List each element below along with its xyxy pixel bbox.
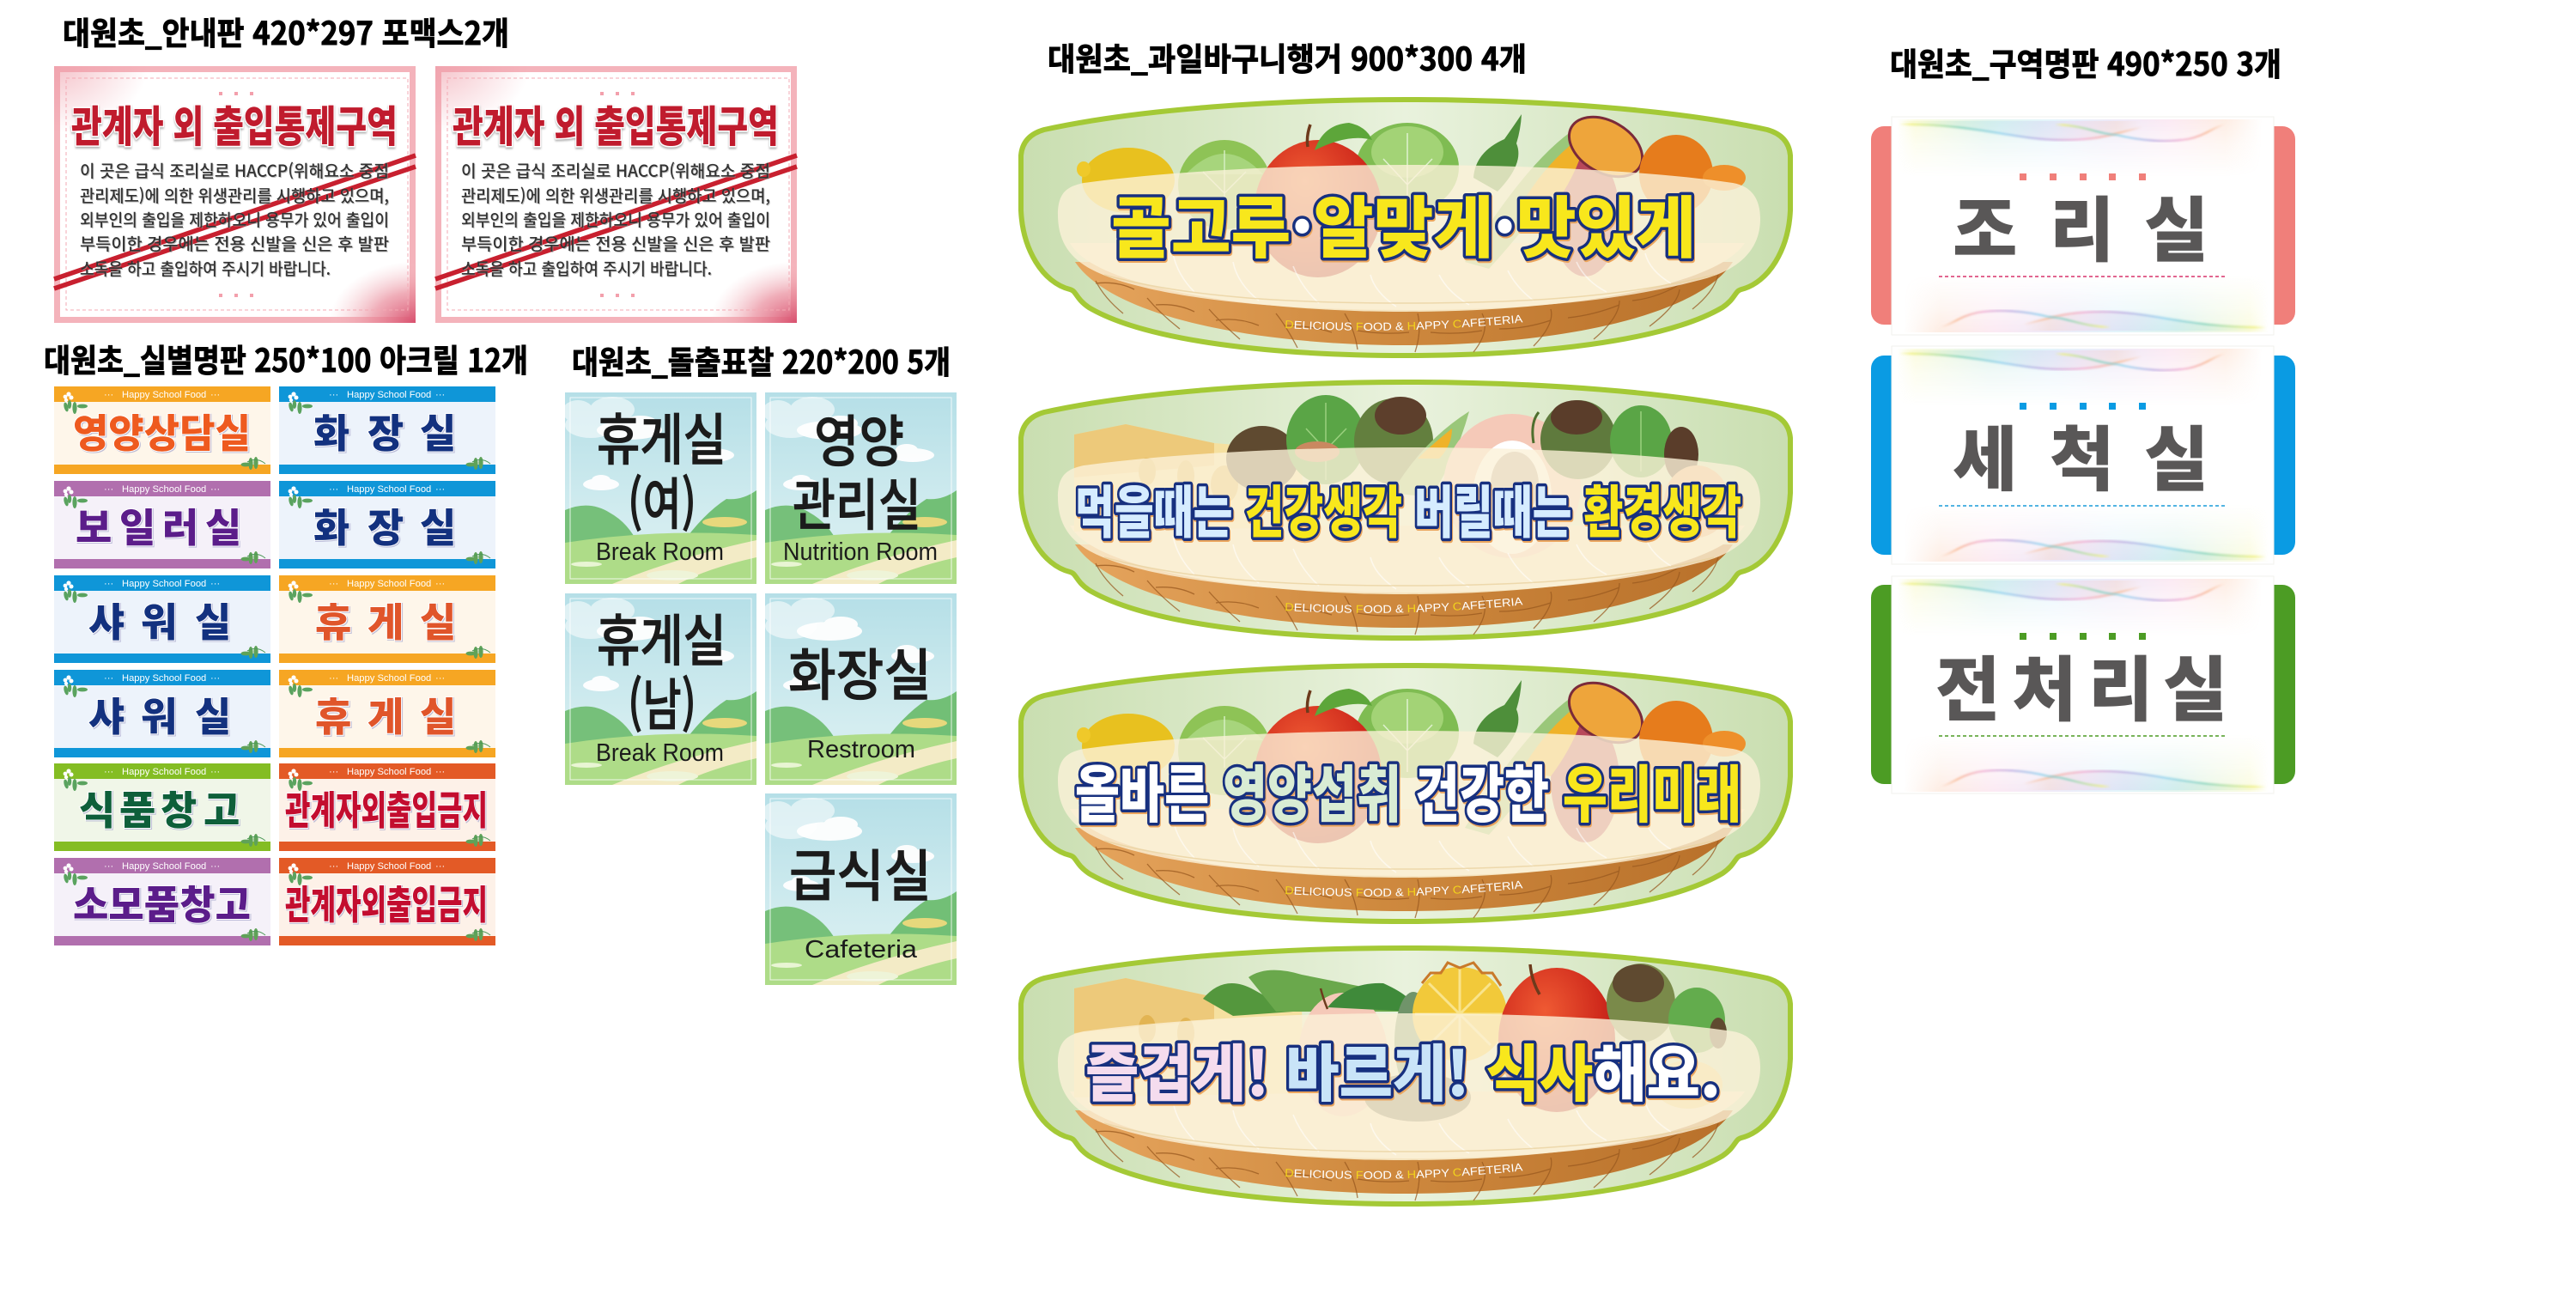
notice board 1: 관계자 외 출입통제구역 [71,93,398,155]
plate: 화장실 1 [279,386,495,474]
notice board 1: 외부인의 출입을 제한하오니 용무가 있어 출입이 [80,206,389,231]
plate: 식품창고 [54,763,270,851]
plate: 샤워실 2 [54,670,270,757]
plate: 화장실 2: ··· [329,484,338,495]
plate: 보일러실: 보일러실 [76,497,241,554]
basket hanger 3: DELICIOUS FOOD & HAPPY CAFETERIA [1285,881,1523,897]
plate: 보일러실: Happy School Food [122,484,206,495]
zone plate: 세척실: 세척실 [1953,403,2208,505]
plate: 영양상담실: 영양상담실 [73,403,251,459]
sign: 휴게실(여): Break Room [596,538,724,566]
heading: 실별명판: 대원초_실별명판 250*100 아크릴 12개 [44,335,528,381]
plate: 화장실 2: 화장실 [313,497,456,554]
basket hanger 2 [1018,380,1793,641]
plate: 관계자외출입금지 2: ··· [435,861,445,872]
sign: 휴게실(여) [562,392,756,584]
plate: 샤워실 2: Happy School Food [122,673,206,684]
sign: 급식실 [762,793,957,985]
notice board 1: 부득이한 경우에는 전용 신발을 신은 후 발판 [80,230,389,255]
plate: 샤워실 1: 샤워실 [88,592,231,648]
plate: 관계자외출입금지 1: 관계자외출입금지 [285,780,488,836]
heading: 과일바구니행거: 대원초_과일바구니행거 900*300 4개 [1048,33,1527,80]
sign: 휴게실(남) [562,593,756,785]
sign: 휴게실(남): 휴게실 [597,596,726,677]
sign: 영양 관리실: 관리실 [793,460,921,541]
sign: 휴게실(남): Break Room [596,739,724,767]
plate: 샤워실 1: ··· [210,579,220,589]
infographic canvas [45,17,2295,1207]
plate: 샤워실 1: ··· [104,579,113,589]
plate: 휴게실 2: ··· [435,673,445,684]
basket hanger 2: 먹을때는 건강생각 버릴때는 환경생각 [1075,467,1741,550]
notice board 2: 소독을 하고 출입하여 주시기 바랍니다. [461,255,712,280]
plate: 휴게실 2 [279,670,495,757]
plate: 소모품창고 [54,858,270,945]
panel: zone plates [1871,117,2295,793]
basket hanger 4 [1018,945,1793,1207]
basket hanger 1 [1018,97,1793,358]
plate: 보일러실: ··· [210,484,220,495]
plate: 화장실 2: Happy School Food [347,484,431,495]
plate: 관계자외출입금지 1: ··· [435,767,445,777]
notice board 2: 외부인의 출입을 제한하오니 용무가 있어 출입이 [461,206,770,231]
plate: 보일러실 [54,481,270,568]
sign: 급식실: Cafeteria [805,936,918,964]
heading: 돌출표찰: 대원초_돌출표찰 220*200 5개 [572,337,951,383]
notice board 2 [435,66,797,323]
plate: 샤워실 1: Happy School Food [122,579,206,589]
plate: 식품창고: ··· [210,767,220,777]
notice board 1 [54,66,416,323]
plate: 화장실 1: Happy School Food [347,390,431,400]
plate: 관계자외출입금지 2: Happy School Food [347,861,431,872]
plate: 관계자외출입금지 1: ··· [329,767,338,777]
plate: 소모품창고: 소모품창고 [73,874,251,931]
plate: 휴게실 1: ··· [329,579,338,589]
plate: 관계자외출입금지 2: ··· [329,861,338,872]
basket hanger 3: 올바른 영양섭취 건강한 우리미래 [1075,745,1741,835]
basket hanger 1: 골고루·알맞게·맛있게 [1111,175,1696,271]
notice board 1: 소독을 하고 출입하여 주시기 바랍니다. [80,255,331,280]
plate: 식품창고: ··· [104,767,113,777]
panel: projecting signs [562,392,957,985]
zone plate: 조리실 [1871,117,2295,335]
sign: 영양 관리실 [762,392,957,584]
plate: 식품창고: Happy School Food [122,767,206,777]
plate: 휴게실 1: 휴게실 [315,592,456,648]
plate: 샤워실 2: ··· [210,673,220,684]
plate: 관계자외출입금지 2: 관계자외출입금지 [285,874,488,931]
plate: 소모품창고: ··· [210,861,220,872]
notice board 2: 관리제도)에 의한 위생관리를 시행하고 있으며, [461,182,770,207]
sign: 화장실: Restroom [807,736,915,763]
plate: 샤워실 2: 샤워실 [88,686,231,743]
plate: 휴게실 2: 휴게실 [315,686,456,743]
sign: 휴게실(남): (남) [628,660,696,741]
zone plate: 세척실 [1871,346,2295,564]
plate: 화장실 1: ··· [329,390,338,400]
sign: 화장실 [762,593,957,785]
zone plate: 조리실: 조리실 [1953,173,2208,276]
plate: 휴게실 1: ··· [435,579,445,589]
plate: 관계자외출입금지 2 [279,858,495,945]
sign: 영양 관리실: 영양 [814,397,904,477]
zone plate: 전처리실 [1871,576,2295,793]
panel: fruit basket hangers [1018,97,1793,1207]
notice board 2: 관계자 외 출입통제구역 [453,93,779,155]
plate: 샤워실 2: ··· [104,673,113,684]
plate: 영양상담실: ··· [104,390,113,400]
plate: 보일러실: ··· [104,484,113,495]
basket hanger 4: DELICIOUS FOOD & HAPPY CAFETERIA [1285,1163,1523,1179]
plate: 휴게실 2: Happy School Food [347,673,431,684]
plate: 소모품창고: ··· [104,861,113,872]
sign: 급식실: 급식실 [789,831,932,912]
plate: 관계자외출입금지 1: Happy School Food [347,767,431,777]
notice board 1: 이 곳은 급식 조리실로 HACCP(위해요소 중점 [80,157,389,182]
sign: 휴게실(여): 휴게실 [597,395,726,476]
plate: 식품창고: 식품창고 [79,780,240,836]
notice board 2: 이 곳은 급식 조리실로 HACCP(위해요소 중점 [461,157,770,182]
notice board 2: 부득이한 경우에는 전용 신발을 신은 후 발판 [461,230,770,255]
sign: 영양 관리실: Nutrition Room [783,538,938,566]
notice board 1: 관리제도)에 의한 위생관리를 시행하고 있으며, [80,182,389,207]
plate: 휴게실 1: Happy School Food [347,579,431,589]
heading: 구역명판: 대원초_구역명판 490*250 3개 [1890,39,2281,85]
plate: 샤워실 1 [54,575,270,663]
sign: 휴게실(여): (여) [628,459,696,540]
panel: notice boards [54,66,797,323]
basket hanger 4: 즐겁게! 바르게! 식사해요. [1085,1024,1721,1114]
plate: 영양상담실 [54,386,270,474]
plate: 화장실 1: ··· [435,390,445,400]
plate: 휴게실 1 [279,575,495,663]
basket hanger 2: DELICIOUS FOOD & HAPPY CAFETERIA [1285,598,1523,613]
plate: 화장실 2: ··· [435,484,445,495]
plate: 화장실 2 [279,481,495,568]
zone plate: 전처리실: 전처리실 [1935,633,2227,735]
plate: 관계자외출입금지 1 [279,763,495,851]
basket hanger 3 [1018,663,1793,924]
plate: 화장실 1: 화장실 [313,403,456,459]
panel: room name plates [54,386,495,945]
plate: 영양상담실: ··· [210,390,220,400]
basket hanger 1: DELICIOUS FOOD & HAPPY CAFETERIA [1285,314,1523,331]
plate: 소모품창고: Happy School Food [122,861,206,872]
plate: 영양상담실: Happy School Food [122,390,206,400]
plate: 휴게실 2: ··· [329,673,338,684]
heading: 안내판: 대원초_안내판 420*297 포맥스2개 [63,8,509,54]
sign: 화장실: 화장실 [788,630,932,711]
